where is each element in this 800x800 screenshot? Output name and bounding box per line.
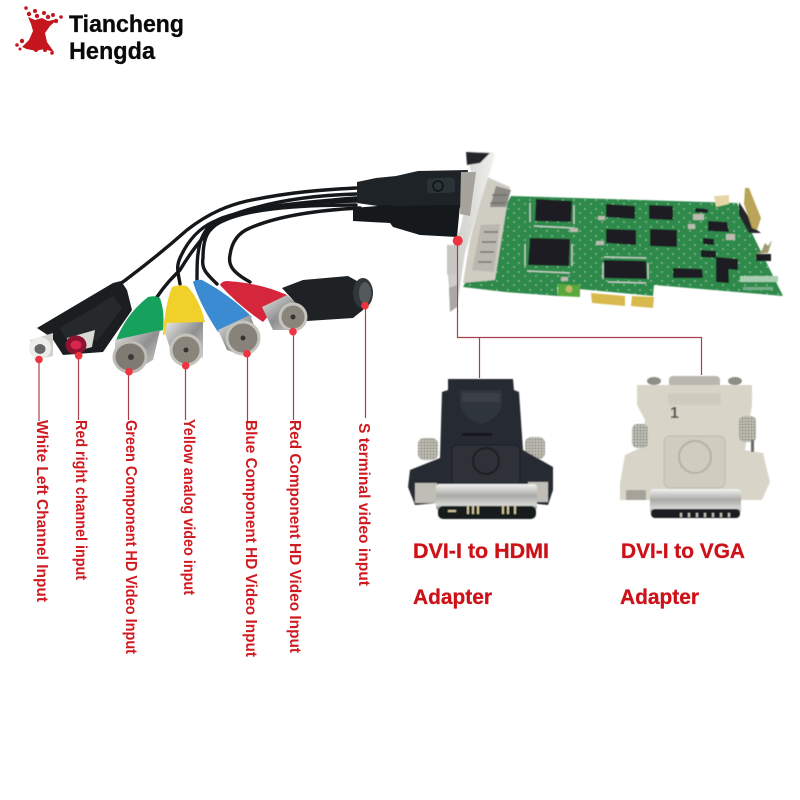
red right channel label: Red right channel input (72, 420, 89, 580)
callout dots (35, 236, 463, 376)
cable bundle (120, 188, 360, 297)
chips (528, 199, 738, 283)
pin header (739, 202, 761, 233)
vertical input labels (33, 419, 372, 657)
VGA adapter caption: DVI-I to VGA (621, 540, 745, 563)
adapter number: 1 (670, 405, 679, 422)
yellow analog label: Yellow analog video input (180, 419, 197, 595)
brand name: Tiancheng (69, 11, 184, 38)
connector block (714, 195, 729, 207)
VGA adapter caption: Adapter (620, 586, 699, 609)
red jack (66, 330, 95, 354)
HDMI adapter caption: Adapter (413, 586, 492, 609)
DVI cable plugs (353, 170, 476, 237)
blue BNC connector (193, 280, 260, 357)
FCC marks (740, 276, 778, 282)
DVI-I to HDMI adapter (408, 379, 553, 519)
HDMI adapter caption: DVI-I to HDMI (413, 540, 549, 563)
logo (15, 6, 184, 65)
logo mark (15, 6, 63, 55)
DVI sockets (463, 177, 510, 283)
adapter captions (413, 540, 745, 609)
capture card (447, 152, 783, 312)
DVI plug metal (650, 489, 741, 513)
leader lines (39, 241, 702, 421)
plug screw (460, 172, 476, 216)
white jack (29, 333, 53, 360)
DVI plug metal (436, 484, 537, 510)
red BNC connector (220, 281, 307, 330)
green BNC connector (114, 296, 164, 373)
small board parts (561, 214, 735, 281)
VGA adapter caption (620, 540, 745, 609)
gold fingers (591, 293, 625, 306)
circuit board (463, 196, 783, 296)
yellow BNC connector (163, 285, 205, 365)
S-video plug (282, 276, 373, 321)
mounting tab (558, 284, 580, 297)
thumb screws (632, 424, 648, 448)
screw plates (415, 483, 437, 503)
brand name: Hengda (69, 38, 156, 65)
HDMI adapter caption (413, 540, 549, 609)
lower plug (353, 205, 460, 237)
DVI-I to VGA adapter (620, 376, 770, 518)
green component label: Green Component HD Video Input (122, 420, 139, 654)
blue component label: Blue Component HD Video Input (242, 420, 259, 657)
red component label: Red Component HD Video Input (286, 420, 303, 653)
s terminal label: S terminal video input (355, 423, 372, 586)
white left channel label: White Left Channel Input (33, 420, 50, 602)
adapter top VGA socket (669, 376, 720, 388)
metal bracket (447, 152, 495, 312)
adapter body (408, 379, 553, 505)
adapter body (620, 385, 770, 500)
upper plug (357, 170, 468, 208)
brand name (69, 11, 184, 65)
chip pin rows (525, 203, 648, 283)
adapter screws (418, 438, 438, 460)
audio RCA jacks (29, 281, 132, 360)
